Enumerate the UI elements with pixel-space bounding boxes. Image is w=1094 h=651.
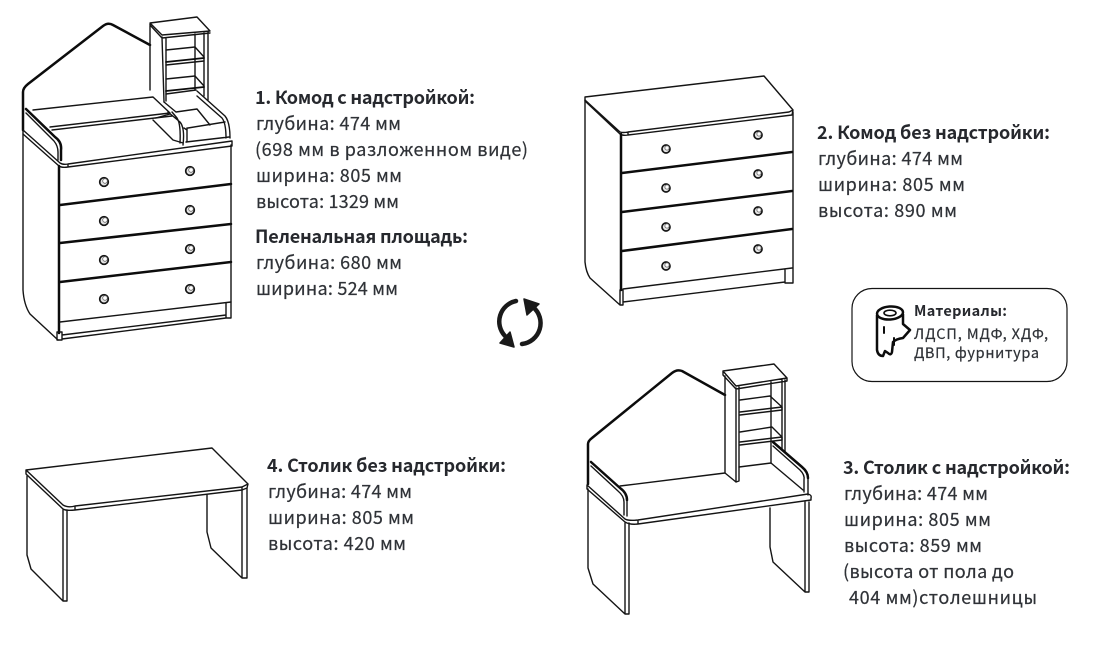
illustration: desk without hutch [26,448,248,601]
text block: item 4 dimensions: высота: 420 мм [268,530,406,556]
icon: rotation arrows [499,299,541,347]
illustration: desk with hutch [587,364,811,614]
dresser top [585,76,793,135]
drawer knobs [662,131,762,270]
dresser body and drawers [23,134,231,340]
text block: item 4 dimensions: ширина: 805 мм [268,504,414,530]
text block: item 2 dimensions [817,119,1050,223]
materials text: ДВП, фурнитура [914,342,1039,363]
text block: item 3 dimensions: 404 мм)столешницы [849,584,1037,610]
desktop [587,485,811,524]
text block: item 3 dimensions: высота: 859 мм [844,532,982,558]
dresser top [23,130,232,167]
shelf unit [150,17,210,102]
text block: item 2 dimensions: глубина: 474 мм [818,145,963,171]
text block: item 2 dimensions: ширина: 805 мм [818,171,965,197]
text block: item 4 dimensions: 4. Столик без надстройки: [267,452,506,478]
text block: item 3 dimensions [843,454,1070,610]
desktop [26,448,248,510]
text block: item 1 dimensions: (698 мм в разложенном виде) [255,136,528,162]
house-shaped back panel [588,370,725,484]
materials text: Материалы: [914,300,1007,321]
text block: item 3 dimensions: глубина: 474 мм [844,480,988,506]
legs [588,489,809,614]
text block: item 1 dimensions: ширина: 805 мм [256,162,402,188]
shelf unit [723,364,787,482]
changing surface and side rails [26,91,230,160]
drawer knobs [100,167,194,303]
materials text: ЛДСП, МДФ, ХДФ, [914,323,1048,344]
dresser body and drawers [585,100,793,305]
text block: item 3 dimensions: ширина: 805 мм [844,506,991,532]
text block: item 3 dimensions: (высота от пола до [843,558,1014,584]
text block: item 1 dimensions: глубина: 474 мм [256,110,401,136]
text block: item 4 dimensions: глубина: 474 мм [268,478,412,504]
house-shaped back panel [23,24,150,130]
text block: item 3 dimensions: 3. Столик с надстройкой: [843,454,1070,480]
text block: item 1 dimensions: глубина: 680 мм [256,249,402,275]
materials text [914,300,1048,363]
desk surface and side rails [591,442,808,516]
text block: item 4 dimensions [267,452,506,556]
text block: item 1 dimensions: высота: 1329 мм [256,188,399,214]
text block: item 1 dimensions: Пеленальная площадь: [255,223,468,249]
illustration: dresser without hutch [585,76,793,305]
text block: item 1 dimensions [255,84,528,301]
text block: item 1 dimensions: ширина: 524 мм [256,275,398,301]
icon: wooden log [877,306,910,356]
callout: materials [852,288,1067,382]
illustration: dresser with hutch [23,17,232,340]
text block: item 2 dimensions: 2. Комод без надстройки: [817,119,1050,145]
text block: item 1 dimensions: 1. Комод с надстройкой: [255,84,475,110]
legs [27,476,247,601]
text block: item 2 dimensions: высота: 890 мм [818,197,957,223]
